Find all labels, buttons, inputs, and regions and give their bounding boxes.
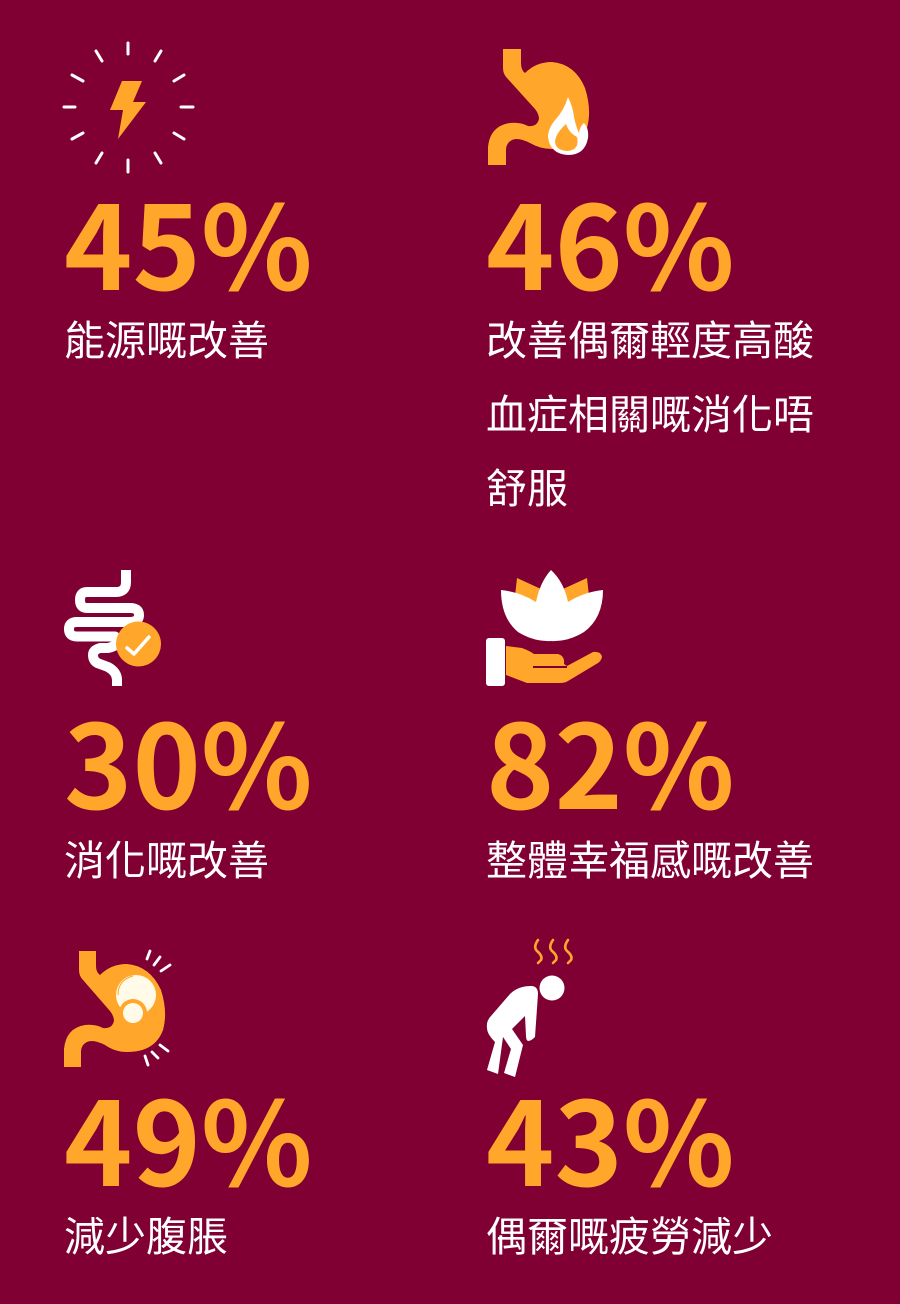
label: energy improvement: 能源嘅改善	[64, 307, 269, 367]
panel: bloating	[64, 950, 313, 1263]
icon: tired person	[486, 938, 573, 1077]
icon: intestine with check	[64, 570, 161, 686]
label: overall wellbeing improvement: 整體幸福感嘅改善	[486, 827, 814, 887]
panel: wellbeing	[486, 570, 814, 887]
icon: bloated stomach	[64, 950, 172, 1067]
label: occasional fatigue reduced: 偶爾嘅疲勞減少	[486, 1203, 773, 1263]
label: occasional mild hyperacidity discomfort: 改善偶爾輕度高酸	[486, 307, 814, 367]
label: digestive improvement: 消化嘅改善	[64, 827, 269, 887]
label: occasional mild hyperacidity discomfort	[486, 307, 814, 515]
stat: 82%: 82%	[486, 675, 735, 843]
panel: fatigue	[486, 938, 773, 1263]
panel: acid reflux	[486, 49, 814, 515]
panel: energy	[62, 42, 313, 367]
icon: lightning bolt with rays	[62, 42, 194, 174]
label: occasional mild hyperacidity discomfort: 舒服	[486, 455, 568, 515]
panel: digestion	[64, 570, 313, 887]
icon: stomach with flame	[488, 49, 590, 165]
icon: lotus on hand	[486, 570, 603, 686]
stat: 45%: 45%	[64, 156, 313, 324]
stat: 49%: 49%	[64, 1052, 313, 1220]
label: occasional mild hyperacidity discomfort: 血症相關嘅消化唔	[486, 381, 814, 441]
stat: 43%: 43%	[486, 1052, 735, 1220]
stat: 46%: 46%	[486, 156, 735, 324]
label: reduced bloating: 減少腹脹	[64, 1203, 228, 1263]
stat: 30%: 30%	[64, 675, 313, 843]
